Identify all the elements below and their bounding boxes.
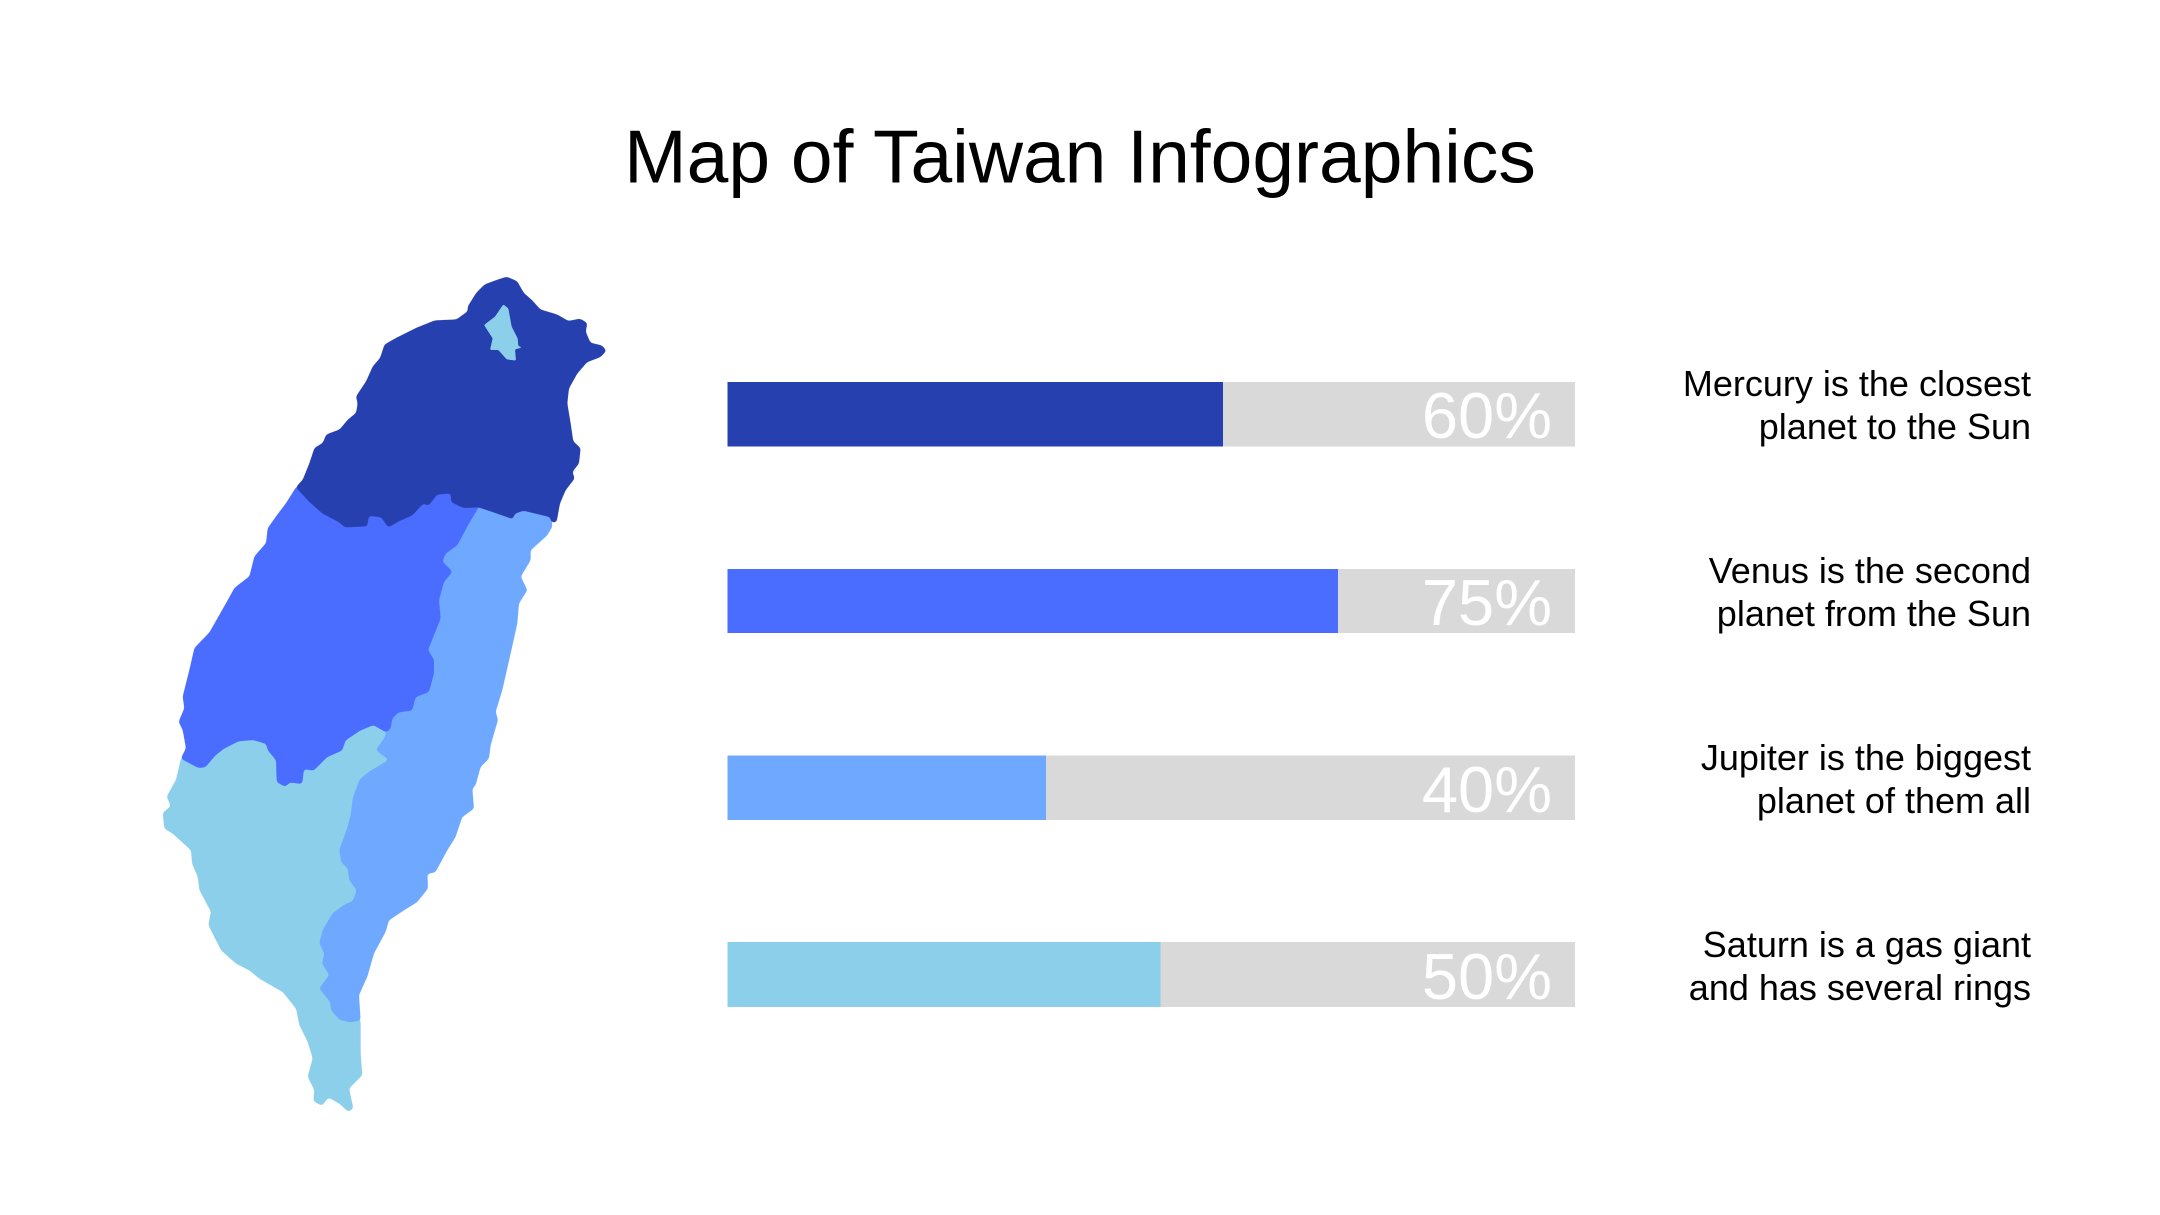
bar row: Saturn 50%: 50% [1422, 940, 1552, 1013]
bar row: Venus 75% [728, 566, 1575, 639]
text: Mercury: planet to the Sun [1759, 406, 2031, 447]
bar row: Venus 75%: 75% [1422, 566, 1552, 639]
bar row: Jupiter 40%: 40% [1422, 753, 1552, 826]
map region: east [320, 507, 552, 1022]
map region: Taipei [484, 304, 523, 361]
map of Taiwan [163, 277, 606, 1111]
text: Saturn: and has several rings [1689, 967, 2031, 1008]
text: Venus: Venus is the second [1709, 550, 2031, 591]
text: Venus: planet from the Sun [1717, 593, 2031, 634]
map region: south [163, 724, 407, 1111]
text: Jupiter: Jupiter is the biggest [1701, 737, 2031, 778]
bar row: Mercury 60%: 60% [1422, 379, 1552, 452]
bar row: Saturn 50% [728, 940, 1575, 1013]
text: Saturn: Saturn is a gas giant [1703, 924, 2031, 965]
text: Mercury: Mercury is the closest [1683, 363, 2031, 404]
bar row: Mercury 60% [728, 379, 1575, 452]
title: Map of Taiwan Infographics [624, 114, 1536, 198]
bar row: Jupiter 40% [728, 753, 1575, 826]
text: Jupiter: planet of them all [1757, 780, 2031, 821]
map region: west-central [179, 477, 478, 786]
map region: north [297, 277, 606, 527]
